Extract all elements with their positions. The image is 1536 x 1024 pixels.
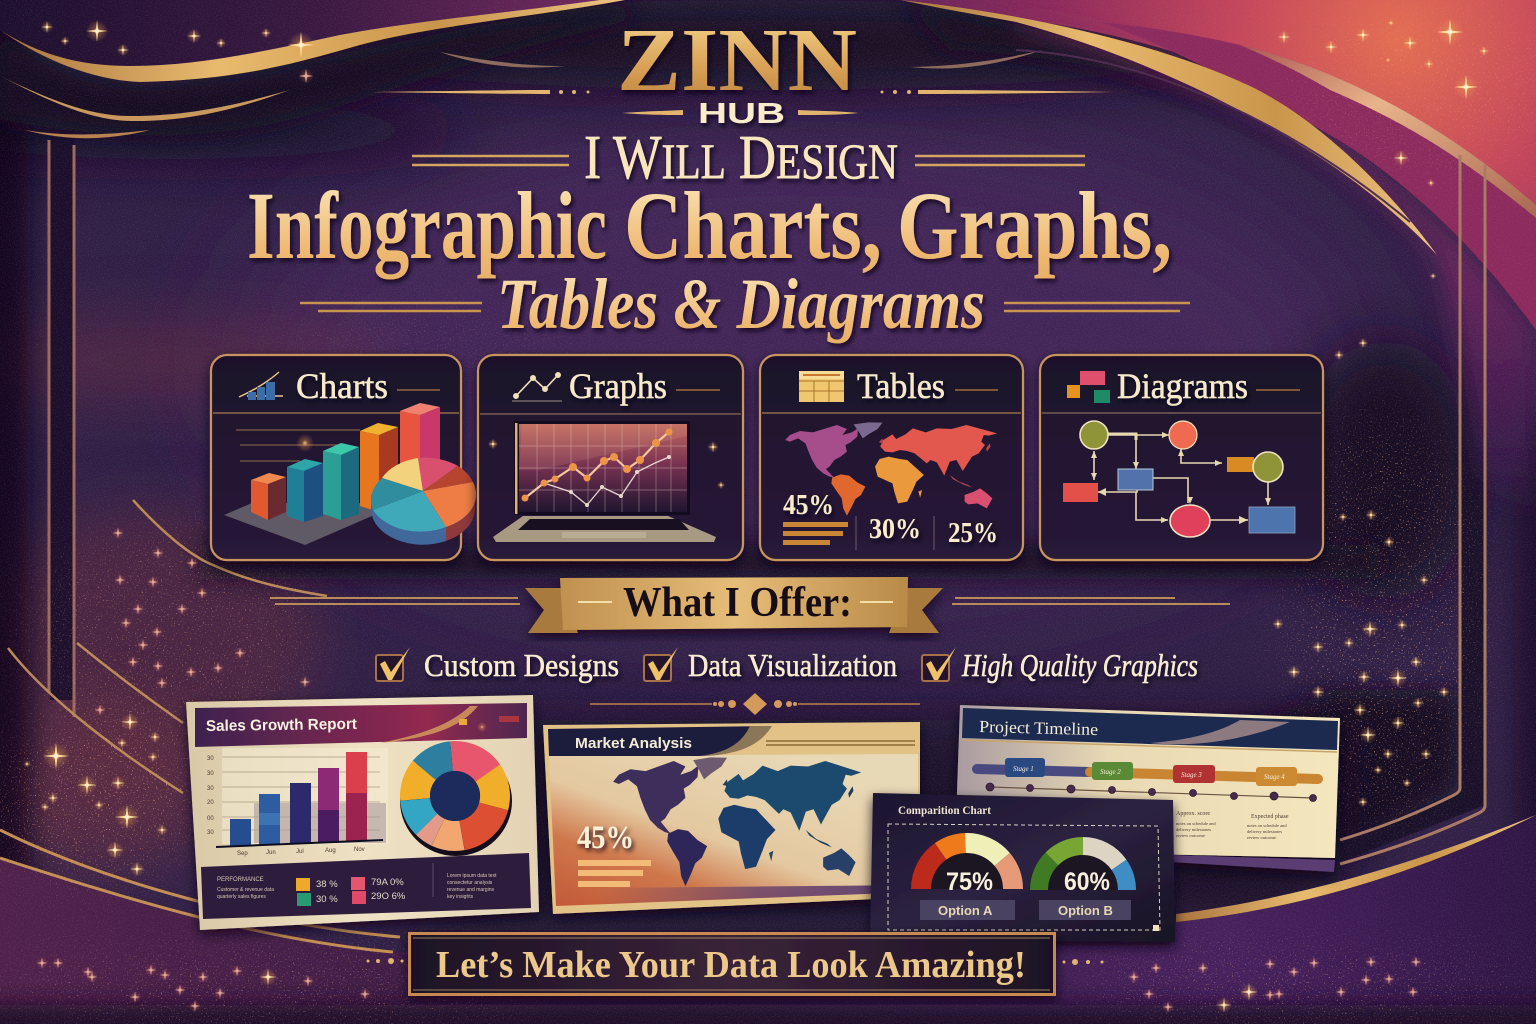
gauge A <box>920 843 1015 920</box>
pie chart 3D <box>371 458 476 545</box>
stats <box>783 489 998 550</box>
sales footer panel: 30 % <box>316 894 338 905</box>
timeline notes: delivery milestones <box>1176 827 1211 832</box>
timeline title: Project Timeline <box>979 717 1098 739</box>
gauge B: 60% <box>1064 868 1110 896</box>
timeline track: Stage 1 <box>1013 765 1034 773</box>
panel: project timeline <box>955 705 1340 872</box>
heading: Graphs: Graphs <box>569 366 667 406</box>
bottom area <box>0 815 1536 1024</box>
sales footer panel: quarterly sales figures <box>217 894 266 900</box>
world map <box>785 422 997 516</box>
timeline track: Stage 3 <box>1181 771 1202 779</box>
sales header <box>195 703 527 747</box>
sales bar chart: Jul <box>296 849 304 855</box>
sales footer panel: PERFORMANCE <box>217 877 264 883</box>
item: High Quality Graphics: High Quality Graphics <box>961 647 1198 683</box>
market stat: 45% <box>577 820 634 856</box>
comparison title: Comparition Chart <box>898 805 991 817</box>
sales bar chart: 30 <box>207 786 214 792</box>
icon: table <box>799 371 844 402</box>
sales title: Sales Growth Report <box>206 716 357 735</box>
icon: flow blocks <box>1067 371 1110 403</box>
main title: Charts, <box>624 172 882 279</box>
thin inner arc <box>1016 50 1410 222</box>
sales donut chart <box>398 739 512 856</box>
secondary title: Tables & Diagrams <box>497 264 985 344</box>
timeline notes: Approx. score <box>1176 811 1210 817</box>
stats: 45% <box>783 489 834 521</box>
market world map <box>613 757 861 886</box>
dashed frame <box>888 824 1160 930</box>
logo rules and dots <box>372 90 1114 115</box>
sales bar chart: 20 <box>207 800 214 806</box>
call to action dots <box>366 958 1104 965</box>
market header <box>548 726 770 756</box>
timeline header <box>962 708 1338 750</box>
gauge A: 75% <box>946 868 993 896</box>
timeline notes <box>1176 811 1289 840</box>
item: Custom Designs: Custom Designs <box>424 647 619 683</box>
market title: Market Analysis <box>575 735 692 752</box>
sales footer panel: 29O 6% <box>371 891 406 902</box>
offer checklist <box>376 647 1198 683</box>
timeline notes: notes on schedule and <box>1176 821 1216 826</box>
frame lines right <box>1340 155 1485 864</box>
top right corner <box>900 0 1536 330</box>
magenta band <box>1016 18 1536 520</box>
timeline notes: delivery milestones <box>1247 829 1282 834</box>
item: Data Visualization: Data Visualization <box>688 647 897 683</box>
sales footer panel: Customer & revenue data <box>217 887 274 893</box>
panel: graphs <box>478 355 743 560</box>
call to action text: Let’s Make Your Data Look Amazing! <box>436 944 1026 986</box>
sparkles on graph panel <box>488 439 725 489</box>
timeline notes: Expected phase <box>1251 814 1289 820</box>
top left band <box>0 0 620 66</box>
sales bar chart: 30 <box>207 830 214 836</box>
timeline notes: notes on schedule and <box>1247 823 1287 828</box>
secondary rules <box>300 303 1190 311</box>
heading: Diagrams: Diagrams <box>1117 366 1248 406</box>
timeline track <box>977 758 1318 802</box>
stats: 30% <box>869 513 921 545</box>
swoosh: top right gold <box>900 0 1437 255</box>
sales bar chart: 00 <box>207 816 214 822</box>
stats: 25% <box>948 517 998 549</box>
ribbon text: What I Offer: <box>623 580 852 626</box>
bottom dark vignette <box>0 1005 1536 1024</box>
bar chart 3D <box>224 403 440 545</box>
heading: Charts: Charts <box>296 366 388 406</box>
timeline notes: review outcome <box>1176 833 1205 838</box>
sales footer panel: consectetur analysis <box>447 880 493 886</box>
panel: charts <box>211 355 476 560</box>
sales bar chart: Nov <box>354 847 365 853</box>
flow diagram <box>1063 421 1295 537</box>
logo: ZINN: ZINN <box>617 11 857 110</box>
frame lines left <box>49 140 74 717</box>
ribbon: What I Offer <box>525 577 943 633</box>
left arcs <box>8 500 327 793</box>
sales footer panel: 79A 0% <box>371 877 404 888</box>
logo: HUB: HUB <box>698 98 785 130</box>
timeline track: Stage 2 <box>1100 768 1121 776</box>
divider rules beside ribbon <box>270 598 1230 604</box>
swoosh: faint top flourish <box>440 50 1043 68</box>
icon: laptop with line chart <box>493 421 716 542</box>
sales bar chart <box>207 748 388 857</box>
timeline notes: review outcome <box>1247 835 1276 840</box>
market footer strip <box>600 885 918 904</box>
panel: tables <box>760 355 1023 560</box>
sales bar chart: Sep <box>237 851 248 857</box>
swoosh: top left gold <box>0 0 625 82</box>
panel: diagrams <box>1040 355 1323 560</box>
swoosh: left thin gold <box>0 76 290 121</box>
sales bar chart: Jun <box>266 850 276 856</box>
sales bar chart: Aug <box>325 848 336 854</box>
swoosh: top right pale <box>1240 45 1536 218</box>
gauge B <box>1039 846 1131 920</box>
ornament divider <box>590 693 920 715</box>
sales footer panel <box>201 853 531 919</box>
panel: comparison chart <box>870 793 1175 942</box>
main title <box>247 172 1172 279</box>
swoosh: lower thin gold <box>25 130 150 138</box>
panel: market analysis <box>543 722 920 914</box>
heading: Tables: Tables <box>857 366 945 406</box>
main title: Infographic <box>247 172 607 279</box>
dark band under top right swoosh <box>900 0 1437 255</box>
bottom left swooshes <box>0 830 400 952</box>
header block <box>247 11 1190 344</box>
icon: growth bars <box>239 372 283 400</box>
panel: sales growth report <box>186 695 539 930</box>
sales bar chart: 30 <box>207 771 214 777</box>
main title: Graphs, <box>897 172 1172 279</box>
bottom right swoosh <box>1176 815 1536 922</box>
call to action <box>410 934 1054 994</box>
dark band under top left swoosh <box>0 2 640 136</box>
gauge B: Option B <box>1058 903 1113 918</box>
sales footer panel: 38 % <box>316 879 338 890</box>
sales footer panel: revenue and margins <box>447 887 494 893</box>
timeline track: Stage 4 <box>1264 773 1285 781</box>
sales footer panel: key insights <box>447 894 474 900</box>
subtitle: I Will Design: I WILL DESIGN <box>584 124 898 192</box>
sales bar chart: 30 <box>207 756 214 762</box>
icon: line graph <box>512 372 562 401</box>
sales footer panel: Lorem ipsum data text <box>447 873 497 879</box>
subtitle rules <box>412 156 1085 165</box>
market stat <box>577 820 651 887</box>
gauge A: Option A <box>938 903 993 918</box>
